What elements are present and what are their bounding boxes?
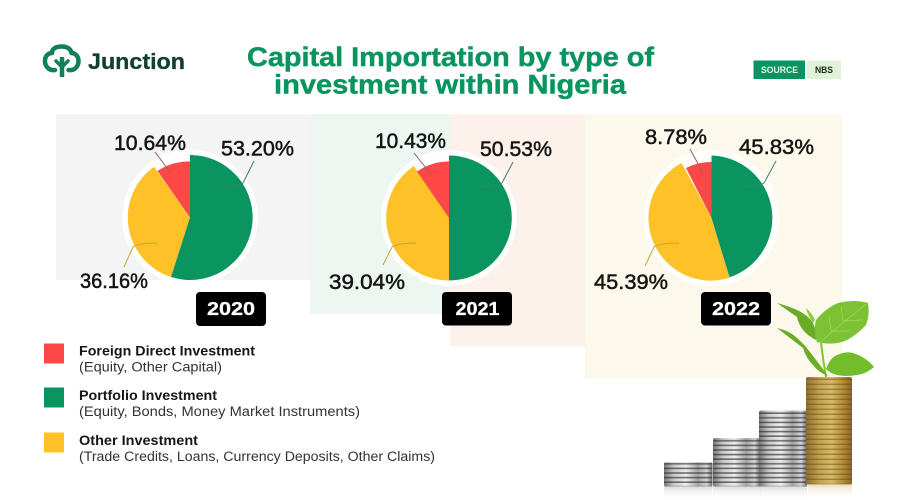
silver stack 1 bbox=[664, 462, 712, 500]
year badge: 2020 bbox=[196, 292, 266, 326]
pie chart: 2020 bbox=[80, 132, 294, 293]
title: investment within Nigeria bbox=[274, 70, 627, 100]
silver stack 3 bbox=[759, 410, 807, 500]
coin stacks bbox=[664, 377, 852, 500]
icon: tree bbox=[45, 46, 78, 77]
panel: 2022 background bbox=[585, 114, 842, 378]
legend item: Foreign Direct Investment: Foreign Direct Investment bbox=[79, 344, 256, 359]
silver stack 2 bbox=[713, 438, 760, 500]
title: Capital Importation by type of bbox=[247, 42, 655, 72]
source tag bbox=[754, 60, 841, 79]
panel: 2021 left background bbox=[310, 114, 450, 314]
value: FDI 2020: 10.64% bbox=[114, 132, 186, 155]
pie chart: 2022 bbox=[594, 126, 814, 294]
legend bbox=[44, 344, 435, 464]
year badge: 2021 bbox=[442, 292, 512, 326]
legend item: Portfolio Investment: Portfolio Investment bbox=[79, 388, 218, 403]
value: Other 2021: 39.04% bbox=[329, 271, 405, 294]
value: FDI 2021: 10.43% bbox=[375, 130, 446, 153]
value: Other 2020: 36.16% bbox=[80, 270, 148, 293]
legend item: Foreign Direct Investment: (Equity, Other Capital) bbox=[79, 360, 222, 375]
year badge: 2022 bbox=[701, 292, 771, 326]
pie chart: 2021 bbox=[329, 130, 552, 294]
value: Portfolio 2021: 50.53% bbox=[480, 138, 552, 161]
legend item: Other Investment: (Trade Credits, Loans, Currency Deposits, Other Claims) bbox=[79, 449, 435, 464]
source tag: SOURCE bbox=[761, 65, 798, 75]
panel: 2020 background bbox=[56, 114, 310, 280]
gold stack bbox=[806, 377, 852, 500]
logo: Junction bbox=[45, 46, 185, 77]
panel: 2021 right background bbox=[450, 114, 585, 346]
value: Other 2022: 45.39% bbox=[594, 271, 668, 294]
logo wordmark: Junction bbox=[88, 49, 185, 74]
value: FDI 2022: 8.78% bbox=[645, 126, 707, 149]
year badge: 2022: 2022 bbox=[712, 298, 760, 319]
plant bbox=[777, 301, 874, 377]
legend item: Other Investment: Other Investment bbox=[79, 433, 199, 448]
year badge: 2021: 2021 bbox=[456, 298, 500, 319]
value: Portfolio 2022: 45.83% bbox=[739, 136, 814, 159]
legend item: Other Investment bbox=[44, 432, 435, 464]
legend item: Foreign Direct Investment bbox=[44, 344, 256, 375]
value: Portfolio 2020: 53.20% bbox=[221, 138, 294, 160]
legend item: Portfolio Investment: (Equity, Bonds, Money Market Instruments) bbox=[79, 404, 360, 419]
source tag: NBS bbox=[815, 65, 833, 75]
title bbox=[247, 42, 655, 100]
year badge: 2020: 2020 bbox=[207, 298, 255, 319]
legend item: Portfolio Investment bbox=[44, 388, 360, 419]
